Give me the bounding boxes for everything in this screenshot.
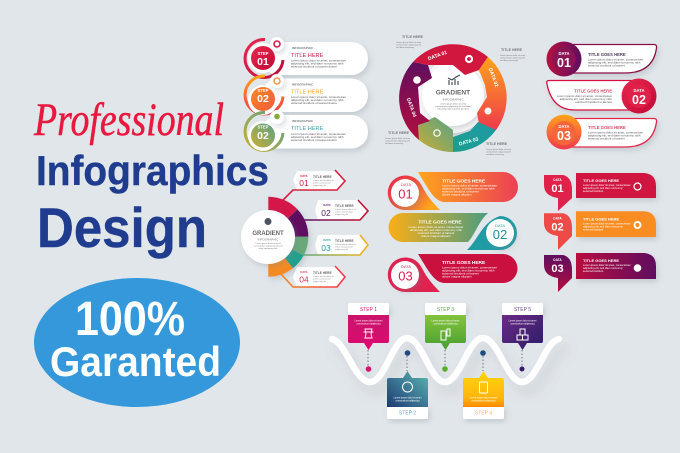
tag 01: TITLE GOES HERE [583,178,619,183]
callout: top left: sed diam nonummy [396,47,415,49]
step 01 [245,37,368,77]
step 2: Lorem ipsum dolor sit amet [394,396,422,400]
tag 01: 01 [551,183,564,195]
callout: bottom left [385,131,410,145]
ribbon 02: dolore magna aliquam [421,234,451,238]
step 03: STEP [258,124,269,130]
centre icon: bulb [264,218,272,225]
data 01 [546,42,657,76]
badge: 100% Garanted [34,278,240,407]
step 01: adipiscing elit, sed diam nonummy nibh [291,62,344,66]
step 5: STEP 5 [514,307,531,313]
step 1: Lorem ipsum dolor sit amet [355,320,383,322]
ribbon 03: dolore magna aliquam [442,274,472,278]
arrow 03: adipiscing elit [335,248,349,251]
data 02: DATA [633,88,645,93]
centre text: GRADIENT [252,231,284,237]
connectors [368,350,522,371]
arrow 04: 04 [299,274,309,284]
panel: tag banners [544,173,656,292]
ribbon 02: Lorem ipsum dolor sit amet, consectetuer [408,225,464,229]
ribbon 03: Lorem ipsum dolor sit amet, consectetuer [442,266,497,270]
callout: bottom right: Lorem ipsum dolor sit amet [486,148,511,151]
centre text [435,90,471,110]
segment labels: DATA 04 [405,97,417,118]
tag 03: euismod tincidunt [583,269,603,273]
ribbon 03: 03 [398,268,413,284]
centre circle [241,210,295,264]
step 03: euismod tincidunt ut laoreet dolore [291,138,337,142]
step 3 [425,303,466,372]
ribbon 02: euismod tincidunt ut laoreet [418,231,455,235]
step 03: TITLE HERE [291,126,324,132]
centre text: INFOGRAPHIC [258,238,279,242]
tag 02: DATA [553,216,562,220]
step 1: STEP 1 [360,307,377,313]
donut centre [417,61,489,133]
panel: gradient donut chart [385,35,525,156]
step 1: consectetuer adipiscing [356,322,381,326]
centre text: INFOGRAPHIC [443,98,464,102]
step 1 [348,303,389,372]
tag 01 [544,173,656,211]
ribbon 03: TITLE GOES HERE [442,260,486,266]
ribbon 02: 02 [493,227,507,242]
step 03 [245,110,368,151]
callout: top right: consectetuer adipiscing elit [500,56,525,60]
step 02 [245,74,368,115]
callout: bottom right: TITLE HERE [486,142,508,146]
data 03: Lorem ipsum dolor sit amet, consectetuer [588,130,643,134]
step 02: Lorem ipsum dolor sit amet, consectetuer [291,95,346,99]
wave [332,338,559,382]
arrow 04: TITLE HERE [313,271,332,275]
arrow 03: 03 [321,243,331,253]
segment: data 03 [453,122,496,152]
segment: data 02 [477,57,507,130]
callout: bottom right [486,142,511,156]
step 3: consectetuer adipiscing [433,322,458,326]
segment: data 01 [413,44,488,75]
step 4: Lorem ipsum dolor sit amet [470,396,498,400]
step 5: consectetuer adipiscing [510,322,535,326]
arrow 03: TITLE HERE [335,239,354,243]
step 2: STEP 2 [399,410,416,416]
arrow 01: amet consectetuer [313,182,331,184]
arrow 04: amet consectetuer [313,278,331,280]
step 4 [463,350,504,419]
step 2 [387,350,428,419]
centre text: GRADIENT [436,90,470,96]
badge: 100% Garanted: Garanted [50,338,221,385]
data 01: 01 [557,56,571,70]
ribbon 03: euismod tincidunt ut laoreet [442,272,479,276]
callout: top left: TITLE HERE [402,35,424,39]
ribbon 03: adipiscing elit, sed diam nonummy nibh [442,268,495,272]
arrow 04 [280,266,345,287]
arrow 04: adipiscing elit [313,280,327,283]
callout: bottom left: TITLE HERE [388,131,410,135]
centre text [252,231,284,250]
callout: bottom left: Lorem ipsum dolor sit amet [385,137,410,140]
data 02: Lorem ipsum dolor sit amet, consectetuer [557,94,612,98]
panel: radial arrows [241,170,368,287]
tag 03: DATA [553,258,562,262]
segment labels: DATA 03 [458,137,479,148]
callout: top right [500,48,525,62]
ribbon 01: dolore magna aliquam [442,192,472,196]
data 02 [547,78,656,114]
callout: bottom right: sed diam nonummy [486,154,505,156]
title: Infographics: Infographics [36,147,269,194]
ribbon 01: adipiscing elit, sed diam nonummy nibh [442,186,495,190]
ribbon 03: DATA [401,264,411,269]
data 03: euismod tincidunt ut laoreet [588,136,625,140]
step 5: Lorem ipsum dolor sit amet [509,320,537,322]
data 01: Lorem ipsum dolor sit amet, consectetuer [588,58,643,62]
step 01: TITLE HERE [291,53,324,59]
arrow 01: adipiscing elit [313,184,327,187]
tag 01: DATA [553,178,562,182]
arrow 02: Lorem ipsum dolor sit [335,208,356,211]
data 02: TITLE GOES HERE [574,88,612,94]
callout: top right: Lorem ipsum dolor sit amet [500,54,525,57]
arrow 02 [303,200,368,220]
step 03: Lorem ipsum dolor sit amet, consectetuer [291,132,346,136]
segment labels [405,50,499,148]
step 3: STEP 3 [437,307,454,313]
step 03: adipiscing elit, sed diam nonummy nibh [291,135,344,139]
callout: top right: TITLE HERE [501,48,523,52]
ribbon 03 [388,254,518,292]
arrow 02: adipiscing elit [335,213,349,216]
arrow 03 [303,235,368,255]
arrow 01: TITLE HERE [313,175,332,179]
callout: top left: consectetuer adipiscing elit [396,44,421,46]
arrow 02: amet consectetuer [335,210,353,214]
ring segments [268,197,308,277]
step 02: INFOGRAPHIC [292,82,314,86]
panel: data banners [546,42,657,150]
ribbon 02: adipiscing elit, sed diam nonummy nibh [410,228,463,232]
tag 01: adipiscing elit, sed diam nonummy [583,186,623,190]
badge: 100% Garanted: 100% [75,293,185,346]
segment icons [413,56,492,136]
callout: bottom left: consectetuer adipiscing elit [385,140,410,142]
step 4: consectetuer adipiscing [471,400,496,402]
arrow 01: Lorem ipsum dolor sit [313,179,334,182]
arrow 02: 02 [321,208,331,218]
panel: step pills [245,37,368,151]
step 4: STEP 4 [475,410,492,416]
panel: wave timeline [332,303,559,419]
ribbon 01: TITLE GOES HERE [442,178,486,184]
title: Professional: Professional [33,94,224,146]
data 03: adipiscing elit, sed diam nonummy nibh [588,134,641,138]
ribbon 01: euismod tincidunt ut laoreet [442,190,479,194]
step 5 [502,303,543,372]
centre text: nonummy nibh euismod tincidunt [437,108,469,110]
tag 02: Lorem ipsum dolor sit amet, consectetuer [583,222,631,226]
step 03: 02 [257,130,269,142]
data 02: 02 [632,93,646,107]
arrow 03: DATA [323,238,331,242]
tag 02 [544,211,656,250]
data 01: adipiscing elit, sed diam nonummy nibh [588,60,641,64]
tag 01: Lorem ipsum dolor sit amet, consectetuer [583,183,631,187]
data 03: DATA [558,124,570,129]
panel: gradient ribbons [388,172,518,292]
step 3: Lorem ipsum dolor sit amet [432,320,460,322]
arrow 03: amet consectetuer [335,246,353,248]
arrow 04: Lorem ipsum dolor sit [313,275,334,278]
arrow 01: 01 [299,178,309,188]
data 02: adipiscing elit, sed diam nonummy nibh [560,97,612,101]
arrow 01: DATA [300,174,308,178]
segment labels: DATA 02 [487,67,499,88]
tag 03: adipiscing elit, sed diam nonummy [583,266,623,270]
arrow 01 [283,170,345,200]
segment labels: DATA 01 [427,50,448,62]
centre text: consectetuer adipiscing elit sed diam [435,105,471,108]
data 01: TITLE GOES HERE [588,52,626,57]
data 01: euismod tincidunt ut laoreet [588,64,625,68]
step 02: 02 [257,93,269,105]
centre icon: chart [448,75,460,85]
ribbon 01: DATA [401,182,411,187]
centre text: diam nonummy nibh [259,248,278,250]
tag 02: euismod tincidunt [583,228,603,232]
tag 02: adipiscing elit, sed diam nonummy [583,224,623,228]
step 02: TITLE HERE [291,90,324,96]
step 01: 01 [257,56,269,68]
data 03 [546,114,657,150]
ribbon 01 [388,172,518,210]
callout: bottom left: sed diam nonummy [385,143,404,145]
data 03: TITLE GOES HERE [588,125,626,130]
data 02: euismod tincidunt ut laoreet [575,100,612,104]
step 01: INFOGRAPHIC [292,46,314,50]
tag 03: TITLE GOES HERE [583,258,619,263]
tag 01: euismod tincidunt [583,189,603,193]
ribbon 01: 01 [398,186,413,202]
step 01: euismod tincidunt ut laoreet dolore [291,64,337,68]
arrow 04: DATA [300,270,308,274]
tag 02: TITLE GOES HERE [583,216,619,222]
step 01: Lorem ipsum dolor sit amet, consectetuer [291,58,346,62]
callout: top left [396,35,424,49]
step 02: euismod tincidunt ut laoreet dolore [291,101,337,105]
segment: data 04 [399,62,432,140]
ribbon 02 [388,213,517,250]
centre text: Lorem ipsum dolor sit amet [440,102,467,106]
callout: top right: sed diam nonummy [500,60,519,62]
callout: top left: Lorem ipsum dolor sit amet [396,41,421,44]
tag 02: 02 [551,222,564,234]
tag 03: Lorem ipsum dolor sit amet, consectetuer [583,263,631,267]
step 02: adipiscing elit, sed diam nonummy nibh [291,98,344,102]
ribbon 02: TITLE GOES HERE [418,220,462,226]
callout: bottom right: consectetuer adipiscing elit [486,150,511,154]
ribbon 02: DATA [495,223,505,228]
arrow 03: Lorem ipsum dolor sit [335,243,356,246]
data 03: 03 [557,129,571,143]
arrow 02: DATA [323,203,331,207]
step 2: consectetuer adipiscing [395,400,420,402]
step 02: STEP [258,88,269,93]
step 03: INFOGRAPHIC [292,119,314,123]
tag 03: 03 [551,263,564,275]
tag 03 [544,253,656,292]
centre text: consectetuer adipiscing elit sed [254,244,283,248]
step 01: STEP [258,51,269,56]
data 01: DATA [558,51,570,56]
ribbon 01: Lorem ipsum dolor sit amet, consectetuer [442,184,497,188]
title: Design: Design [37,196,207,259]
centre text: Lorem ipsum dolor sit amet [255,242,281,245]
segment: green pentagon [418,117,453,152]
arrow 02: TITLE HERE [335,204,354,208]
